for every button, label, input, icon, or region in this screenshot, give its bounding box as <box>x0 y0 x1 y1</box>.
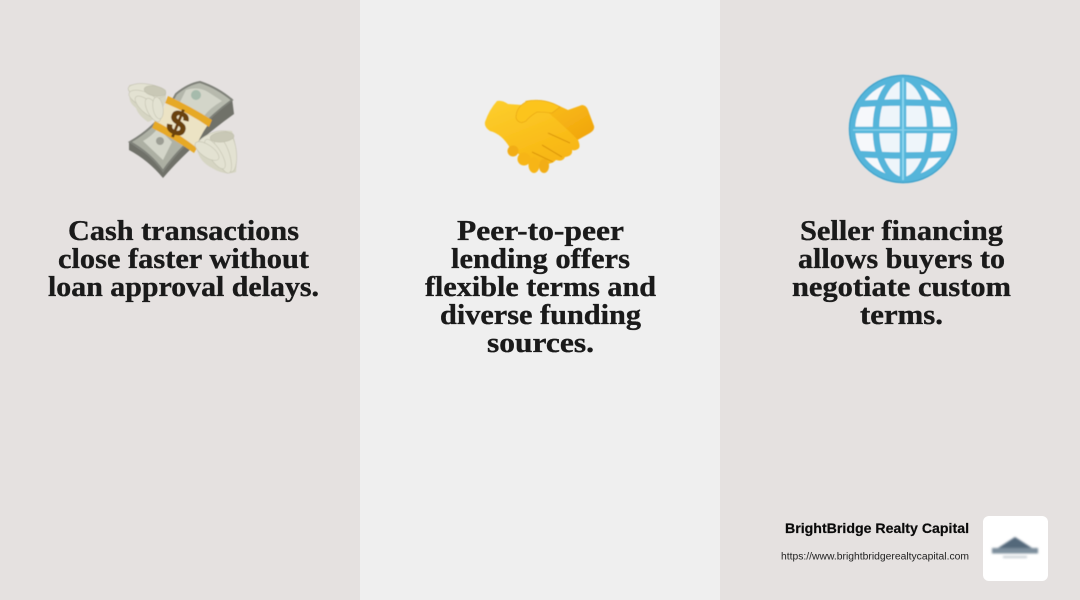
logo card <box>983 516 1048 581</box>
heading: cash transactions: loan approval delays. <box>48 271 319 303</box>
heading: peer-to-peer lending: diverse funding <box>440 299 642 331</box>
heading: cash transactions: Cash transactions <box>68 215 299 247</box>
panel: peer-to-peer lending <box>360 0 720 600</box>
heading: peer-to-peer lending: Peer-to-peer <box>457 215 624 247</box>
heading: peer-to-peer lending: flexible terms and <box>425 271 656 303</box>
panel: seller financing <box>720 0 1080 600</box>
panel: cash transactions <box>0 0 360 600</box>
icon part: right wing <box>192 127 238 175</box>
icon: money with wings: $ <box>161 102 194 145</box>
heading: seller financing: negotiate custom <box>792 271 1011 303</box>
heading: peer-to-peer lending: sources. <box>487 327 594 359</box>
icon part: left wing <box>127 81 167 124</box>
brand footer <box>781 516 1048 581</box>
heading: peer-to-peer lending <box>425 215 656 359</box>
website url: https://www.brightbridgerealtycapital.com <box>781 552 969 562</box>
icon: globe with meridians <box>850 76 956 182</box>
company name: BrightBridge Realty Capital <box>785 520 969 536</box>
heading: seller financing: allows buyers to <box>798 243 1005 275</box>
heading: seller financing: terms. <box>860 299 943 331</box>
heading: peer-to-peer lending: lending offers <box>451 243 630 275</box>
icon: handshake <box>485 100 594 173</box>
heading: seller financing: Seller financing <box>800 215 1004 247</box>
heading: cash transactions: close faster without <box>58 243 309 275</box>
icon: money with wings <box>127 81 238 178</box>
heading: cash transactions <box>48 215 319 303</box>
heading: seller financing <box>792 215 1011 331</box>
